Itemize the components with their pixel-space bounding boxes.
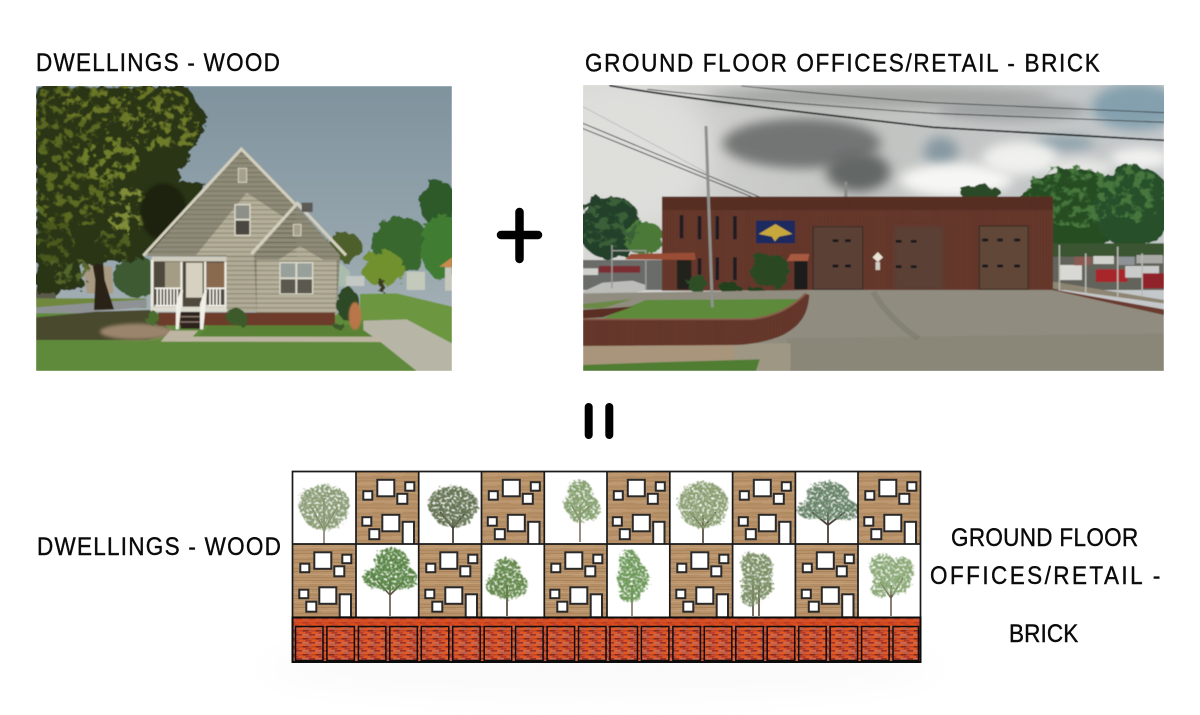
windows xyxy=(234,168,313,294)
business sign xyxy=(756,221,795,243)
background structures xyxy=(407,272,425,290)
grass strips xyxy=(583,299,800,371)
left parking lot xyxy=(583,244,663,294)
tree 7 xyxy=(486,558,528,616)
wood house tile 8 xyxy=(544,544,607,617)
label: ground floor offices/retail brick xyxy=(930,524,1160,648)
wires xyxy=(583,86,1164,197)
tile grid lines xyxy=(292,472,920,618)
tree 8 xyxy=(617,550,649,616)
building elevation diagram xyxy=(292,472,921,662)
tree 4 xyxy=(678,482,728,543)
tree 6 xyxy=(363,548,417,616)
tree 1 xyxy=(299,484,349,544)
label: ground floor offices/retail brick: GROUND FLOOR xyxy=(951,524,1138,552)
plus sign xyxy=(501,212,538,259)
heading: dwellings wood: DWELLINGS - WOOD xyxy=(36,49,280,77)
trees xyxy=(577,165,1172,258)
curved brick retaining wall xyxy=(583,293,809,346)
shrubs xyxy=(145,287,357,329)
wood house tile 5 xyxy=(858,472,921,545)
photo: wood frame house xyxy=(27,82,462,371)
concrete driveway and sidewalk xyxy=(583,290,1164,371)
flagpole xyxy=(706,126,712,307)
background trees right xyxy=(113,180,462,297)
lower row: dwellings and trees xyxy=(292,544,920,617)
large tree xyxy=(27,82,207,310)
wood house tile 3 xyxy=(606,472,670,545)
wood house tile 10 xyxy=(796,544,858,617)
equals sign (rotated bars) xyxy=(589,407,609,435)
wood house tile 6 xyxy=(293,544,356,617)
tree 2 xyxy=(428,486,478,543)
photo: brick commercial building xyxy=(583,85,1164,371)
driveway and sidewalk xyxy=(363,319,452,371)
house body xyxy=(143,149,346,325)
label: ground floor offices/retail brick: BRICK xyxy=(1009,620,1078,648)
label: ground floor offices/retail brick: OFFICES/RETAIL - xyxy=(930,562,1160,590)
heading: ground floor offices/retail brick: GROUND FLOOR OFFICES/RETAIL - BRICK xyxy=(585,49,1100,78)
brick building xyxy=(662,197,1053,291)
awnings, hazard sign, entrance xyxy=(625,252,883,289)
mulch under tree xyxy=(36,310,173,340)
wood house tile 4 xyxy=(732,472,796,545)
porch xyxy=(151,257,227,329)
wood house tile 7 xyxy=(419,544,482,617)
right parking lot xyxy=(1052,243,1164,317)
tree 9 xyxy=(741,552,773,616)
shrubs xyxy=(687,253,789,293)
tree 10 xyxy=(870,554,914,616)
cloudy sky xyxy=(583,85,1164,371)
label: dwellings wood: DWELLINGS - WOOD xyxy=(37,533,281,561)
lawn and road xyxy=(36,298,146,308)
tree 5 xyxy=(797,481,860,543)
sky xyxy=(36,86,452,314)
tree 3 xyxy=(564,480,600,542)
upper row: dwellings and trees xyxy=(292,472,921,545)
wood house tile 1 xyxy=(356,472,419,545)
garage doors xyxy=(813,226,1028,289)
wood house tile 9 xyxy=(670,544,733,617)
brick ground floor xyxy=(292,618,920,662)
wood house tile 2 xyxy=(482,472,544,545)
